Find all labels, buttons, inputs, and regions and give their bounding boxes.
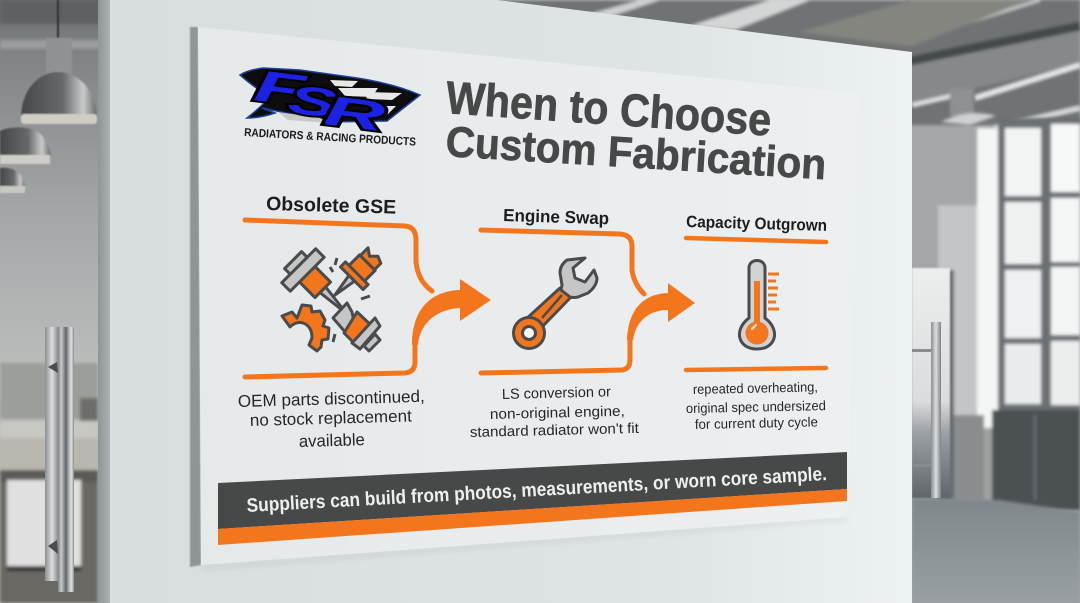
left door handle (45, 327, 74, 592)
logo: FSR Radiators and Racing Products (240, 61, 420, 149)
description: capacity outgrown: repeated overheating, (693, 379, 818, 397)
description: engine swap: standard radiator won't fit (470, 421, 639, 441)
ceiling (480, 0, 1080, 128)
sign board (198, 27, 860, 565)
rear wall, window and radiator (938, 118, 1080, 510)
pendant lamps (0, 0, 97, 193)
description: obsolete GSE: no stock replacement (250, 406, 412, 430)
top rule (686, 238, 826, 242)
ceiling lamp (941, 88, 996, 125)
icon part: spindle (276, 243, 357, 324)
icon part: broken bolt (333, 303, 380, 351)
title: Custom Fabrication (444, 118, 828, 189)
icon part: pin (324, 243, 387, 306)
title (444, 71, 828, 189)
background: office left of wall (0, 0, 100, 603)
floor (912, 498, 1080, 603)
right door handle (912, 322, 941, 498)
logo swoosh (240, 68, 420, 123)
icon: wrench (514, 258, 597, 348)
title: When to Choose (444, 71, 773, 146)
logo letter F: F (252, 61, 309, 116)
description: obsolete GSE (238, 387, 425, 451)
description: engine swap (470, 384, 639, 441)
description: obsolete GSE: available (299, 430, 365, 451)
icon: thermometer (739, 260, 779, 349)
sign shadow (190, 27, 201, 567)
panel: obsolete GSE (238, 193, 491, 451)
heading: Capacity Outgrown: Capacity Outgrown (686, 213, 827, 235)
bottom banner (218, 452, 847, 545)
icon part: broken gear (282, 305, 329, 351)
description: capacity outgrown: for current duty cycle (695, 414, 818, 432)
heading: Engine Swap: Engine Swap (503, 205, 609, 228)
description: engine swap: non-original engine, (490, 404, 625, 423)
description: engine swap: LS conversion or (502, 384, 611, 403)
background: office right of wall (480, 0, 1080, 603)
logo letter S: S (286, 77, 339, 127)
description: obsolete GSE: OEM parts discontinued, (238, 387, 425, 411)
panel: engine swap (470, 205, 695, 441)
bottom rule (686, 368, 826, 370)
connector lines and arrow (481, 230, 695, 373)
logo tagline: RADIATORS & RACING PRODUCTS (244, 127, 417, 149)
heading: Obsolete GSE: Obsolete GSE (266, 193, 396, 219)
connector lines and arrow (245, 220, 491, 377)
description: capacity outgrown: original spec undersized (686, 398, 826, 416)
white box behind handle (912, 268, 950, 498)
icon fragments (330, 258, 370, 342)
panel: capacity outgrown (686, 213, 827, 432)
logo letter R: R (322, 86, 388, 140)
wall panel (98, 0, 912, 603)
icon: broken parts (276, 243, 387, 351)
description: capacity outgrown (686, 379, 826, 432)
banner text: Suppliers can build from photos, measurements, or worn core sample. (246, 463, 827, 517)
